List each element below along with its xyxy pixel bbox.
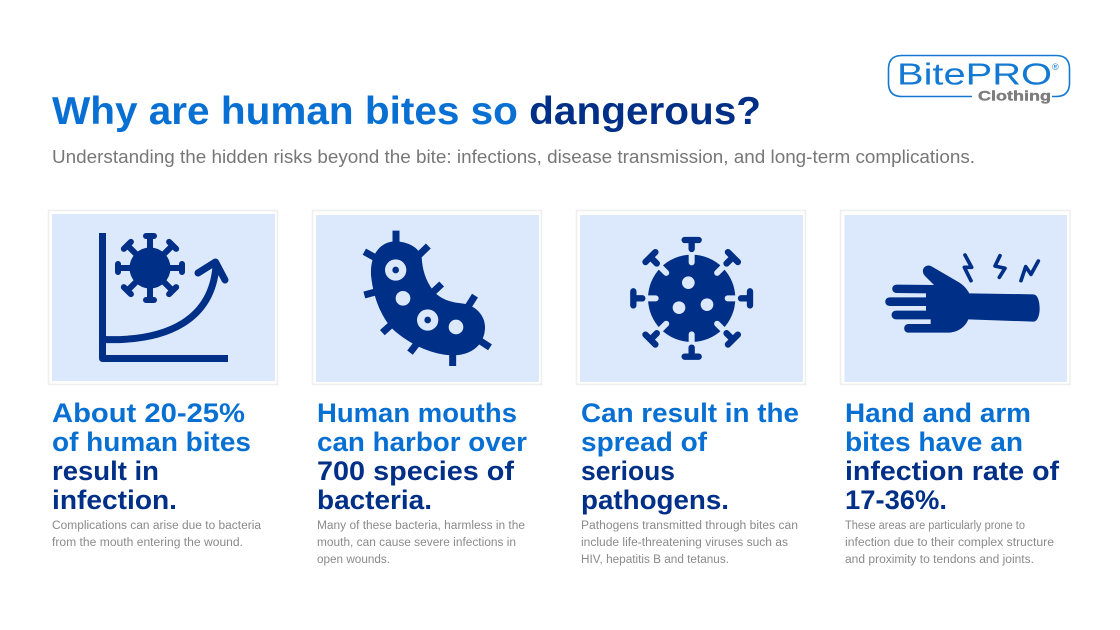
logo: BitePRO Clothing: BitePRO bbox=[897, 56, 1052, 92]
subtitle: Understanding the hidden risks beyond the bite: infections, disease transmission, and long-term complications. bbox=[52, 147, 975, 167]
body text: pathogens: Pathogens transmitted through bites can bbox=[581, 520, 798, 532]
heading: serious pathogens: serious bbox=[581, 456, 675, 486]
body text: pathogens bbox=[581, 520, 798, 566]
heading: 17-36% bbox=[845, 398, 1060, 515]
body text: bacteria bbox=[317, 520, 525, 566]
body text: hand and arm: These areas are particularly prone to bbox=[845, 520, 1025, 532]
body text: hand and arm bbox=[845, 520, 1054, 566]
icon: hand with pain bolts bbox=[885, 255, 1040, 333]
logo: BitePRO Clothing: ® bbox=[1052, 62, 1059, 72]
card background: pathogens bbox=[580, 215, 803, 382]
card frame: pathogens bbox=[576, 210, 806, 384]
logo: BitePRO Clothing bbox=[888, 56, 1070, 104]
body text: complications: from the mouth entering the wound. bbox=[52, 537, 243, 549]
body text: bacteria: mouth, can cause severe infections in bbox=[317, 537, 516, 549]
panel: bacteria bbox=[312, 210, 542, 566]
heading: serious pathogens: Can result in the bbox=[581, 398, 799, 428]
heading: 700 species: Human mouths bbox=[317, 398, 517, 428]
heading: 20-25% bbox=[52, 398, 251, 515]
card background: bacteria bbox=[316, 215, 539, 382]
heading: 700 species: bacteria. bbox=[317, 485, 432, 515]
logo: BitePRO Clothing: Clothing bbox=[978, 88, 1051, 104]
card background: hand and arm bbox=[844, 215, 1067, 382]
body text: complications bbox=[52, 520, 262, 549]
body text: bacteria: Many of these bacteria, harmless in the bbox=[317, 520, 525, 532]
card frame: bacteria bbox=[312, 210, 542, 384]
panel: hand and arm bites bbox=[840, 210, 1070, 566]
icon: virus bbox=[633, 240, 750, 357]
icon: bacterium bbox=[364, 231, 490, 366]
panel: pathogens bbox=[576, 210, 806, 566]
body text: pathogens: HIV, hepatitis B and tetanus. bbox=[581, 554, 729, 566]
heading: 17-36%: infection rate of bbox=[845, 456, 1060, 486]
heading: 20-25%: of human bites bbox=[52, 427, 251, 457]
heading: 700 species bbox=[317, 398, 527, 515]
heading: serious pathogens: spread of bbox=[581, 427, 708, 457]
heading: 20-25%: About 20-25% bbox=[52, 398, 245, 428]
body text: complications: Complications can arise due to bacteria bbox=[52, 520, 262, 532]
card frame: hand and arm bbox=[840, 210, 1070, 384]
heading: 20-25%: result in bbox=[52, 456, 159, 486]
heading: serious pathogens: pathogens. bbox=[581, 485, 729, 515]
heading: 17-36%: 17-36%. bbox=[845, 485, 947, 515]
body text: bacteria: open wounds. bbox=[317, 554, 390, 566]
panel: infection rate bbox=[48, 210, 278, 549]
card frame: infection chart bbox=[48, 210, 278, 384]
icon: virus growth chart bbox=[102, 233, 228, 358]
heading: 17-36%: bites have an bbox=[845, 427, 1023, 457]
heading: 20-25%: infection. bbox=[52, 485, 177, 515]
body text: hand and arm: and proximity to tendons and joints. bbox=[845, 554, 1034, 566]
heading: 700 species: 700 species of bbox=[317, 456, 515, 486]
body text: hand and arm: infection due to their complex structure bbox=[845, 537, 1054, 549]
card background: infection chart bbox=[52, 214, 275, 381]
heading: 700 species: can harbor over bbox=[317, 427, 527, 457]
heading: serious pathogens bbox=[581, 398, 799, 515]
body text: pathogens: include life-threatening viruses such as bbox=[581, 537, 788, 549]
heading: 17-36%: Hand and arm bbox=[845, 398, 1031, 428]
title: Why are human bites so dangerous? bbox=[52, 90, 761, 133]
